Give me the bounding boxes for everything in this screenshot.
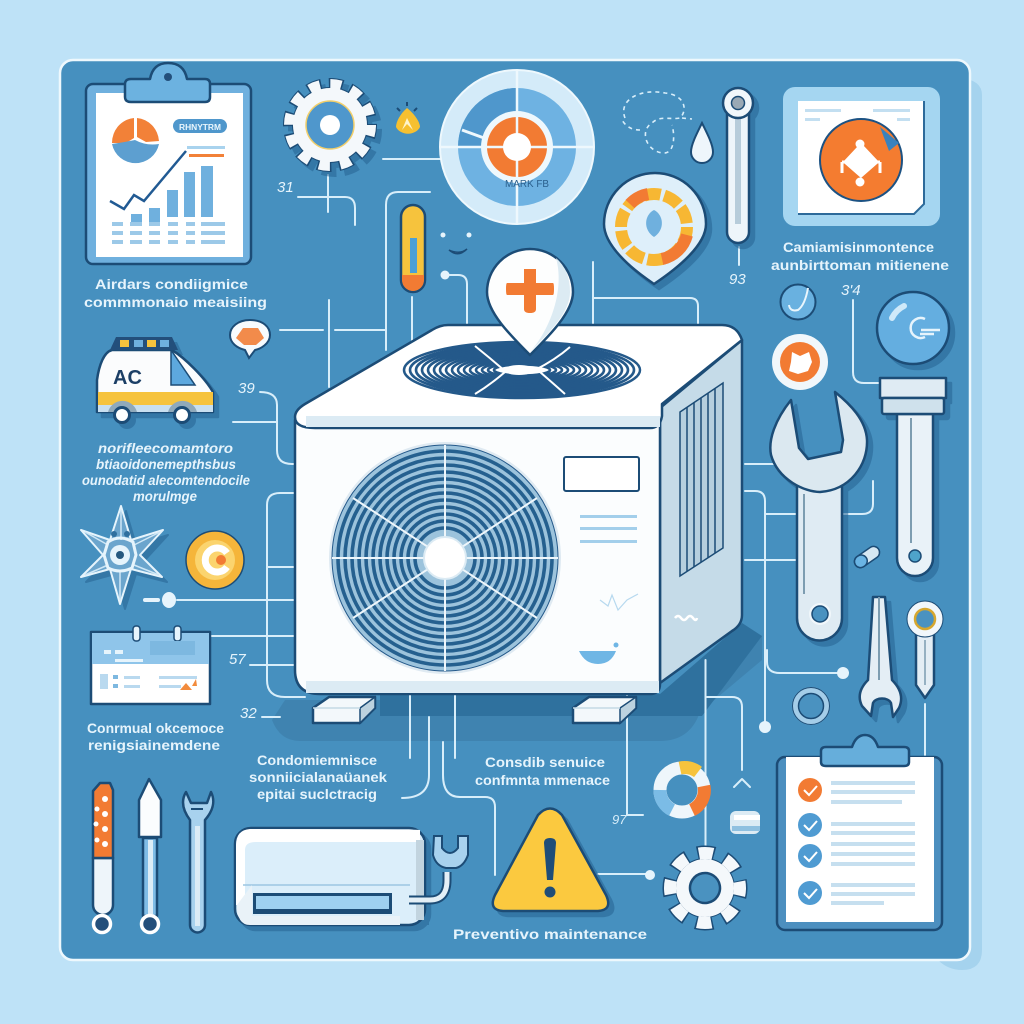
- caption: center lower left: Condomiemnisce: [257, 752, 377, 768]
- icon: top gear: [289, 84, 371, 166]
- checklist clipboard: [777, 735, 942, 930]
- label: 32: 32: [240, 705, 257, 722]
- icon: thermometer: [401, 205, 425, 292]
- icon: blue lens: [877, 292, 949, 364]
- icon: small face marks: [440, 232, 472, 254]
- icon: orange puzzle circle: [772, 334, 828, 390]
- clipboard with chart: [86, 63, 251, 264]
- icon: capsule: [852, 544, 882, 570]
- label: 93: 93: [729, 271, 746, 288]
- icon: service van: [97, 337, 213, 422]
- icon: small blue dial: [780, 284, 816, 320]
- main blue panel: [60, 60, 970, 960]
- unit side face: [660, 340, 742, 683]
- trend line: [110, 146, 225, 209]
- caption: top left: commmonaio meaisiing: [84, 294, 267, 310]
- indoor AC unit: [235, 828, 425, 925]
- unit top face: [295, 325, 742, 428]
- caption: top right: Camiamisinmontence: [783, 239, 934, 255]
- caption: left middle: [82, 440, 250, 504]
- label: 39: 39: [238, 380, 255, 397]
- icon: lifebuoy donut: [660, 767, 704, 812]
- icon: t-handle tool: [880, 378, 946, 576]
- panel text lines: [580, 515, 637, 543]
- icon: large wrench: [770, 392, 867, 640]
- caption: center lower right: Consdib senuice: [485, 754, 605, 770]
- icon: slim wrench: [183, 792, 213, 933]
- connector lines: [177, 159, 925, 875]
- caption: left middle: ounodatid alecomtendocile: [82, 472, 250, 488]
- caption: center lower right: [475, 754, 610, 788]
- icon: orange handled tool: [93, 783, 113, 932]
- label: 97: 97: [612, 812, 627, 827]
- caption: top right: aunbirttoman mitienene: [771, 257, 949, 273]
- unit left foot: [313, 697, 375, 723]
- icon: color wheel pin: [604, 173, 706, 284]
- caption: center lower left: sonniicialanaüanek: [249, 769, 387, 785]
- front fan: [329, 442, 561, 674]
- clipboard clip: [125, 63, 210, 102]
- caption: left middle: btiaoidonemepthsbus: [96, 456, 236, 472]
- water mark: [579, 594, 638, 664]
- icon: tall tool: [723, 88, 753, 243]
- icon: gold coin: [186, 531, 244, 589]
- outdoor AC unit: [295, 325, 742, 723]
- bar chart: [131, 166, 213, 225]
- icon: pipe and clamp: [409, 836, 468, 900]
- top fan grille: [404, 342, 640, 398]
- clip hole: [164, 73, 172, 81]
- icon: small cylinder: [730, 811, 760, 834]
- caption: left middle: morulmge: [133, 488, 197, 504]
- icon: gauge dial: MARK FB: [505, 179, 549, 190]
- caption: left lower: renigsiainemdene: [88, 737, 220, 753]
- label: 57: 57: [229, 651, 246, 668]
- display panel: [564, 457, 639, 491]
- check items: [798, 778, 822, 905]
- badge: RHNYTRM: [179, 123, 221, 132]
- caption: left lower: [87, 720, 224, 753]
- icon: dashed outline: [622, 92, 692, 153]
- card: orange badge: [783, 87, 940, 226]
- caption: left middle: norifleecomamtoro: [98, 440, 233, 456]
- icon: medical plus pin: [487, 249, 573, 355]
- caption: top left: Airdars condiigmice: [95, 276, 248, 292]
- icon: pointed key tool: [907, 601, 943, 698]
- unit front face: [295, 420, 660, 694]
- caption: left lower: Conrmual okcemoce: [87, 720, 224, 736]
- caption: center lower left: epitai suclctracig: [257, 786, 377, 802]
- icon: bottom gear: [664, 847, 746, 929]
- caption: center lower right: confmnta mmenace: [475, 772, 610, 788]
- table rows: [112, 222, 225, 244]
- indoor unit air slot: [253, 893, 392, 914]
- icon: star fan blade: [81, 506, 163, 604]
- panel shadow: [938, 78, 982, 970]
- caption: center lower left: [249, 752, 387, 802]
- caption: top left: [84, 276, 267, 310]
- icon: ring washer: [792, 688, 830, 724]
- connector end dots: [440, 270, 849, 880]
- side mark: [675, 616, 697, 620]
- unit shadow: [272, 623, 762, 741]
- icon: pointed screwdriver: [139, 779, 161, 932]
- side vent: [680, 383, 723, 576]
- van lettering: AC: [113, 367, 142, 389]
- caption: top right: [771, 239, 949, 273]
- unit right foot: [573, 697, 636, 723]
- icon: flame bulb: [396, 102, 420, 134]
- icon: connector plug: [143, 592, 176, 608]
- icon: speech bubble: [230, 320, 270, 358]
- badge: [173, 119, 227, 133]
- check item lines: [831, 781, 915, 905]
- pie chart: [112, 118, 159, 163]
- icon: water drop: [691, 123, 713, 163]
- label: 31: 31: [277, 179, 294, 196]
- icon: narrow open wrench: [860, 597, 901, 717]
- icon: gauge dial: [440, 70, 594, 224]
- icon: warning triangle: [493, 808, 608, 911]
- checklist clip: [821, 735, 909, 766]
- label: 34: 3'4: [841, 282, 861, 299]
- caption: preventive maintenance: Preventivo maintenance: [453, 926, 647, 942]
- calendar: [91, 626, 210, 704]
